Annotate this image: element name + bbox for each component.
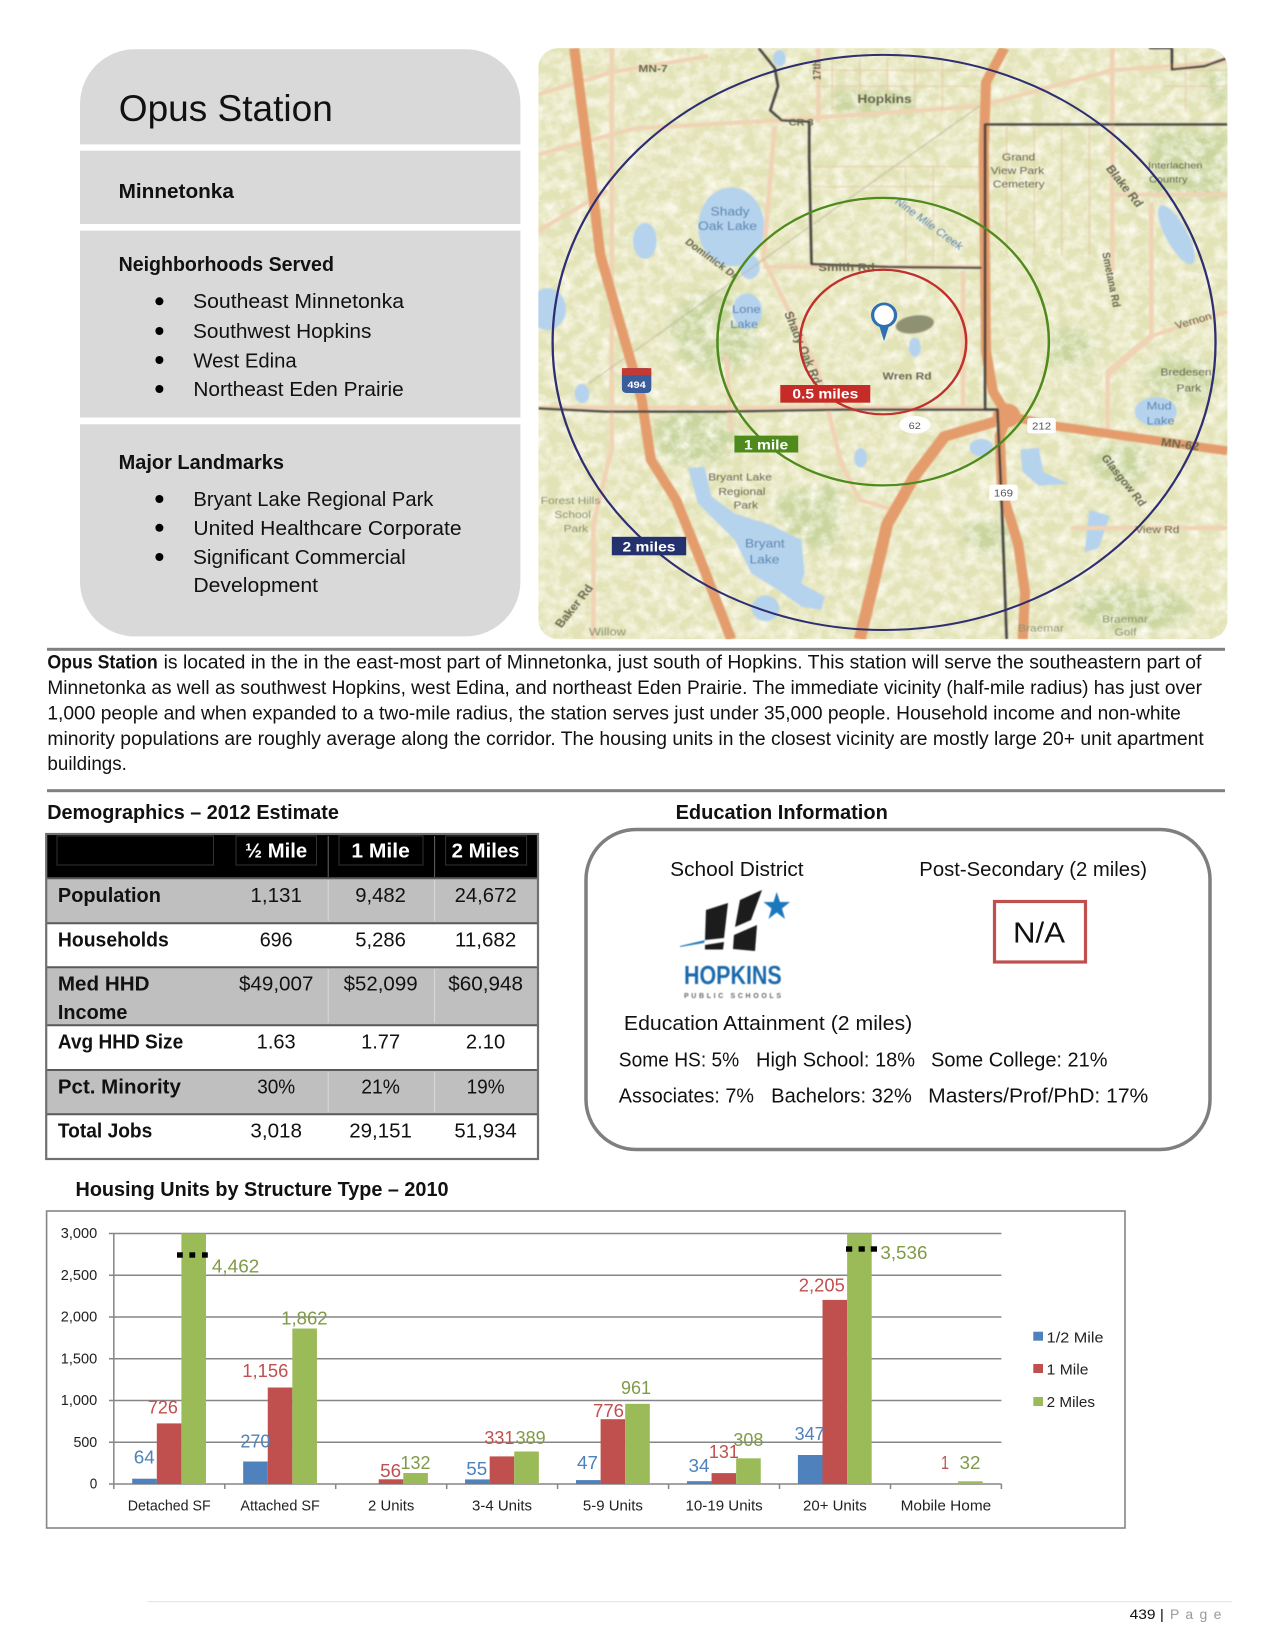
text: education attainment: High School: 18% [756, 1050, 915, 1072]
row: households: 11,682 [455, 930, 516, 952]
divider [47, 648, 1225, 651]
data labels: one mile: 1,156 [242, 1361, 288, 1381]
map place labels: View Rd [1135, 524, 1179, 536]
table header row: 2 Miles [452, 841, 520, 863]
row: median household income: Med HHD [58, 974, 150, 996]
x axis labels: 10-19 Units [686, 1498, 763, 1514]
map place labels: MN-62 [1160, 436, 1201, 453]
map circle: 2 miles [553, 55, 1216, 630]
footer: page number [148, 1601, 1232, 1622]
map place labels: Regional [718, 487, 765, 498]
data labels: two miles: 389 [516, 1428, 546, 1448]
text: education attainment: Education Attainment (2 miles) [624, 1013, 912, 1035]
map place labels: Shady Oak Rd [781, 310, 825, 386]
icon: highway shields: 169 [994, 488, 1013, 499]
icon: highway shields: 494 [627, 381, 646, 391]
divider [47, 789, 1225, 792]
landmarks list: Significant Commercial [193, 547, 406, 569]
text: education attainment: Some HS: 5% [619, 1050, 739, 1072]
map place labels: Shady [711, 204, 750, 218]
icon: location pin [873, 304, 896, 341]
data labels: half mile: 347 [795, 1424, 825, 1444]
map place labels: Lake [750, 552, 779, 566]
map label: 2 miles [612, 537, 686, 555]
map place labels: Willow [589, 625, 626, 638]
map place labels: Glasgow Rd [1098, 453, 1148, 509]
bars: one mile [157, 1300, 847, 1484]
map place labels: 17th [812, 60, 824, 80]
icon: Hopkins Public Schools logo: PUBLIC SCHOOLS [684, 993, 781, 1000]
text block: station description: Minnetonka as well as southwest Hopkins, west Edina, and northeast Eden Prairie. The immediate vicinity (half-mile radius) has just over [47, 678, 1203, 699]
row: average household size: 1.63 [257, 1032, 296, 1054]
axis break marks [177, 1246, 877, 1258]
neighborhoods list: Neighborhoods Served [119, 254, 334, 276]
x axis labels: 3-4 Units [472, 1498, 532, 1514]
x axis labels: 2 Units [368, 1498, 414, 1514]
map place labels: Interlachen [1148, 161, 1203, 171]
row: average household size: 1.77 [361, 1032, 400, 1054]
y axis labels: 500 [74, 1434, 97, 1451]
map place labels: School [554, 510, 591, 521]
data labels: one mile [148, 1276, 949, 1481]
map place labels: MN-7 [638, 63, 668, 75]
y axis labels: 0 [90, 1476, 97, 1492]
map place labels: Blake Rd [1103, 163, 1146, 210]
row: median household income: $52,099 [344, 974, 418, 996]
row: percent minority: 19% [467, 1076, 505, 1098]
heading: demographics: Demographics – 2012 Estimate [47, 802, 339, 824]
row: median household income: $60,948 [448, 974, 523, 996]
map place labels: Braemar [1018, 623, 1064, 634]
row: total jobs: 3,018 [250, 1121, 302, 1143]
text: education attainment: Associates: 7% [619, 1086, 754, 1108]
map place labels: Forest Hills [541, 496, 601, 507]
map place labels: Park [733, 500, 758, 512]
x axis labels: Detached SF [128, 1498, 211, 1514]
text block: station description: is located in the in the east-most part of Minnetonka, just south of Hopkins. This station will serve the southeastern part of [164, 652, 1202, 673]
map place labels: Wren Rd [883, 371, 932, 382]
row: population [58, 885, 517, 907]
bar chart: housing units by structure type [47, 1211, 1125, 1528]
landmarks list: United Healthcare Corporate [193, 518, 462, 540]
row: total jobs: 29,151 [349, 1121, 412, 1143]
heading: education: Education Information [676, 802, 888, 824]
landmarks list [119, 452, 462, 597]
map place labels: Country [1149, 175, 1188, 185]
text block: station description [47, 652, 1204, 775]
icon: highway shields [622, 368, 1056, 501]
text block: station description: minority populations are roughly average along the corridor. The housing units in the closest vicinity are mostly large 20+ unit apartment [47, 729, 1204, 750]
data labels: one mile: 131 [709, 1442, 739, 1462]
row: population: 1,131 [250, 885, 302, 907]
row: percent minority: Pct. Minority [58, 1076, 182, 1098]
map label: 0.5 miles [780, 385, 870, 403]
data labels: half mile: 34 [688, 1456, 710, 1476]
row: average household size: Avg HHD Size [58, 1032, 183, 1054]
table header row [245, 841, 520, 863]
map place labels: Oak Lake [698, 219, 757, 233]
title: Opus Station [119, 88, 333, 129]
map place labels: Lake [1147, 414, 1175, 427]
y axis labels: 2,000 [61, 1308, 97, 1326]
map label: 1 mile: 1 mile [744, 438, 788, 453]
heading: housing units: Housing Units by Structure Type – 2010 [76, 1179, 448, 1201]
data labels: two miles: 308 [733, 1430, 763, 1450]
landmarks list: Development [193, 575, 318, 597]
map place labels: View Park [991, 165, 1044, 177]
map place labels: Vernon [1174, 311, 1213, 332]
x axis labels: Mobile Home [901, 1498, 991, 1514]
data labels: half mile: 55 [466, 1459, 487, 1479]
data labels: one mile: 726 [148, 1398, 178, 1418]
row: percent minority: 21% [361, 1076, 400, 1098]
row: households: 5,286 [355, 930, 406, 952]
row: households: 696 [260, 930, 293, 952]
row: population: 24,672 [455, 885, 517, 907]
table header row: ½ Mile [245, 841, 307, 863]
map place labels: Cemetery [993, 179, 1045, 190]
row: average household size [58, 1032, 505, 1054]
map place labels: Park [1177, 383, 1201, 394]
callout: N/A: N/A [1013, 918, 1066, 950]
row: population: Population [58, 885, 161, 907]
row: median household income: $49,007 [239, 974, 313, 996]
data labels: half mile [134, 1424, 825, 1479]
row: average household size: 2.10 [466, 1032, 505, 1054]
legend: 2 Miles [1047, 1394, 1095, 1411]
row: total jobs: 51,934 [454, 1121, 517, 1143]
icon: highway shields: 212 [1032, 421, 1051, 432]
data labels: two miles: 3,536 [880, 1243, 927, 1263]
data labels: one mile: 1 [941, 1453, 949, 1473]
row: total jobs: Total Jobs [58, 1121, 152, 1143]
text block: station description: Opus Station [47, 652, 158, 673]
neighborhoods list: Southeast Minnetonka [193, 291, 405, 313]
text: education attainment: Some College: 21% [931, 1050, 1108, 1072]
neighborhoods list: West Edina [193, 350, 298, 372]
table: demographics [46, 834, 538, 1159]
bars: half mile [132, 1455, 822, 1484]
data labels: one mile: 776 [593, 1401, 624, 1421]
bars: two miles [181, 1234, 983, 1484]
text: education attainment: Bachelors: 32% [771, 1086, 912, 1108]
data labels: two miles [212, 1243, 980, 1473]
row: percent minority: 30% [257, 1076, 295, 1098]
data labels: two miles: 961 [621, 1378, 651, 1398]
data labels: one mile: 2,205 [799, 1276, 845, 1296]
data labels: one mile: 331 [484, 1428, 514, 1448]
map place labels: Park [564, 524, 589, 535]
map place labels: Baker Rd [552, 582, 596, 630]
neighborhoods list [119, 254, 405, 401]
map place labels: Dominick Dr [682, 237, 740, 281]
row: percent minority [58, 1076, 505, 1098]
map: station radius map [529, 48, 1241, 639]
x axis labels: Attached SF [240, 1498, 320, 1514]
legend: 1/2 Mile [1047, 1329, 1104, 1346]
x axis labels [128, 1498, 991, 1514]
table header row: 1 Mile [351, 841, 410, 863]
map place labels: Bryant Lake [708, 472, 772, 483]
data labels: two miles: 132 [400, 1453, 430, 1473]
map label: 1 mile [734, 436, 798, 453]
data labels: one mile: 56 [380, 1461, 401, 1481]
map place labels: Smith Rd [818, 261, 875, 274]
map place labels: Nine Mile Creek [892, 196, 966, 253]
x axis labels: 20+ Units [803, 1498, 867, 1514]
legend [1033, 1329, 1104, 1411]
text block: station description: buildings. [47, 754, 127, 775]
map place labels: Golf [1115, 627, 1137, 638]
text block: station description: 1,000 people and when expanded to a two-mile radius, the station serves just under 35,000 people. Household income and non-white [47, 703, 1181, 724]
data labels: two miles: 4,462 [212, 1256, 259, 1276]
icon: Hopkins Public Schools logo [680, 890, 790, 1000]
neighborhoods list: Southwest Hopkins [193, 321, 371, 343]
map place labels: Lake [730, 318, 758, 331]
y axis labels: 3,000 [61, 1225, 97, 1242]
neighborhoods list: Northeast Eden Prairie [193, 379, 404, 401]
map place labels: Mud [1147, 399, 1172, 412]
label: post-secondary: Post-Secondary (2 miles) [919, 859, 1147, 881]
panel: education information [586, 830, 1210, 1150]
landmarks list: Bryant Lake Regional Park [193, 489, 434, 511]
map place labels [541, 60, 1213, 638]
map place labels: Lone [732, 303, 761, 316]
y axis labels: 1,500 [61, 1350, 97, 1367]
icon: Hopkins Public Schools logo: HOPKINS [684, 960, 782, 990]
map place labels: CR 3 [789, 118, 814, 128]
map place labels: Grand [1002, 152, 1035, 163]
map place labels: Hopkins [857, 92, 912, 106]
city name: Minnetonka [119, 181, 235, 203]
map place labels: Braemar [1102, 614, 1148, 625]
row: households: Households [58, 930, 169, 952]
map place labels: Bryant [745, 536, 785, 550]
callout: N/A [994, 902, 1086, 962]
map circle: half mile [800, 270, 966, 414]
landmarks list: Major Landmarks [119, 452, 284, 474]
data labels: half mile: 47 [577, 1453, 598, 1473]
legend: 1 Mile [1047, 1361, 1088, 1378]
y axis labels [61, 1225, 97, 1492]
row: total jobs [58, 1121, 517, 1143]
map place labels: Bredesen [1160, 367, 1212, 378]
map place labels: Smetana Rd [1099, 252, 1122, 308]
text: education attainment: Masters/Prof/PhD: 17% [928, 1086, 1149, 1108]
data labels: half mile: 270 [240, 1432, 270, 1452]
label: school district: School District [670, 859, 804, 881]
data labels: two miles: 32 [960, 1453, 980, 1473]
map circle: 1 mile [717, 198, 1049, 485]
row: median household income: Income [58, 1002, 128, 1024]
data labels: half mile: 64 [134, 1448, 155, 1468]
data labels: two miles: 1,862 [281, 1308, 328, 1328]
row: median household income [58, 974, 523, 1024]
row: population: 9,482 [355, 885, 406, 907]
x axis labels: 5-9 Units [583, 1498, 643, 1514]
y axis labels: 2,500 [61, 1267, 97, 1284]
footer: page number: 439 | [1130, 1606, 1164, 1622]
text: education attainment [619, 1013, 1149, 1108]
icon: highway shields: 62 [909, 421, 921, 432]
map label: 0.5 miles: 0.5 miles [792, 387, 858, 402]
panel: station summary [80, 49, 520, 636]
row: households [58, 930, 516, 952]
footer: page number: P a g e [1170, 1606, 1222, 1622]
map label: 2 miles: 2 miles [623, 540, 675, 555]
y axis labels: 1,000 [61, 1392, 97, 1409]
